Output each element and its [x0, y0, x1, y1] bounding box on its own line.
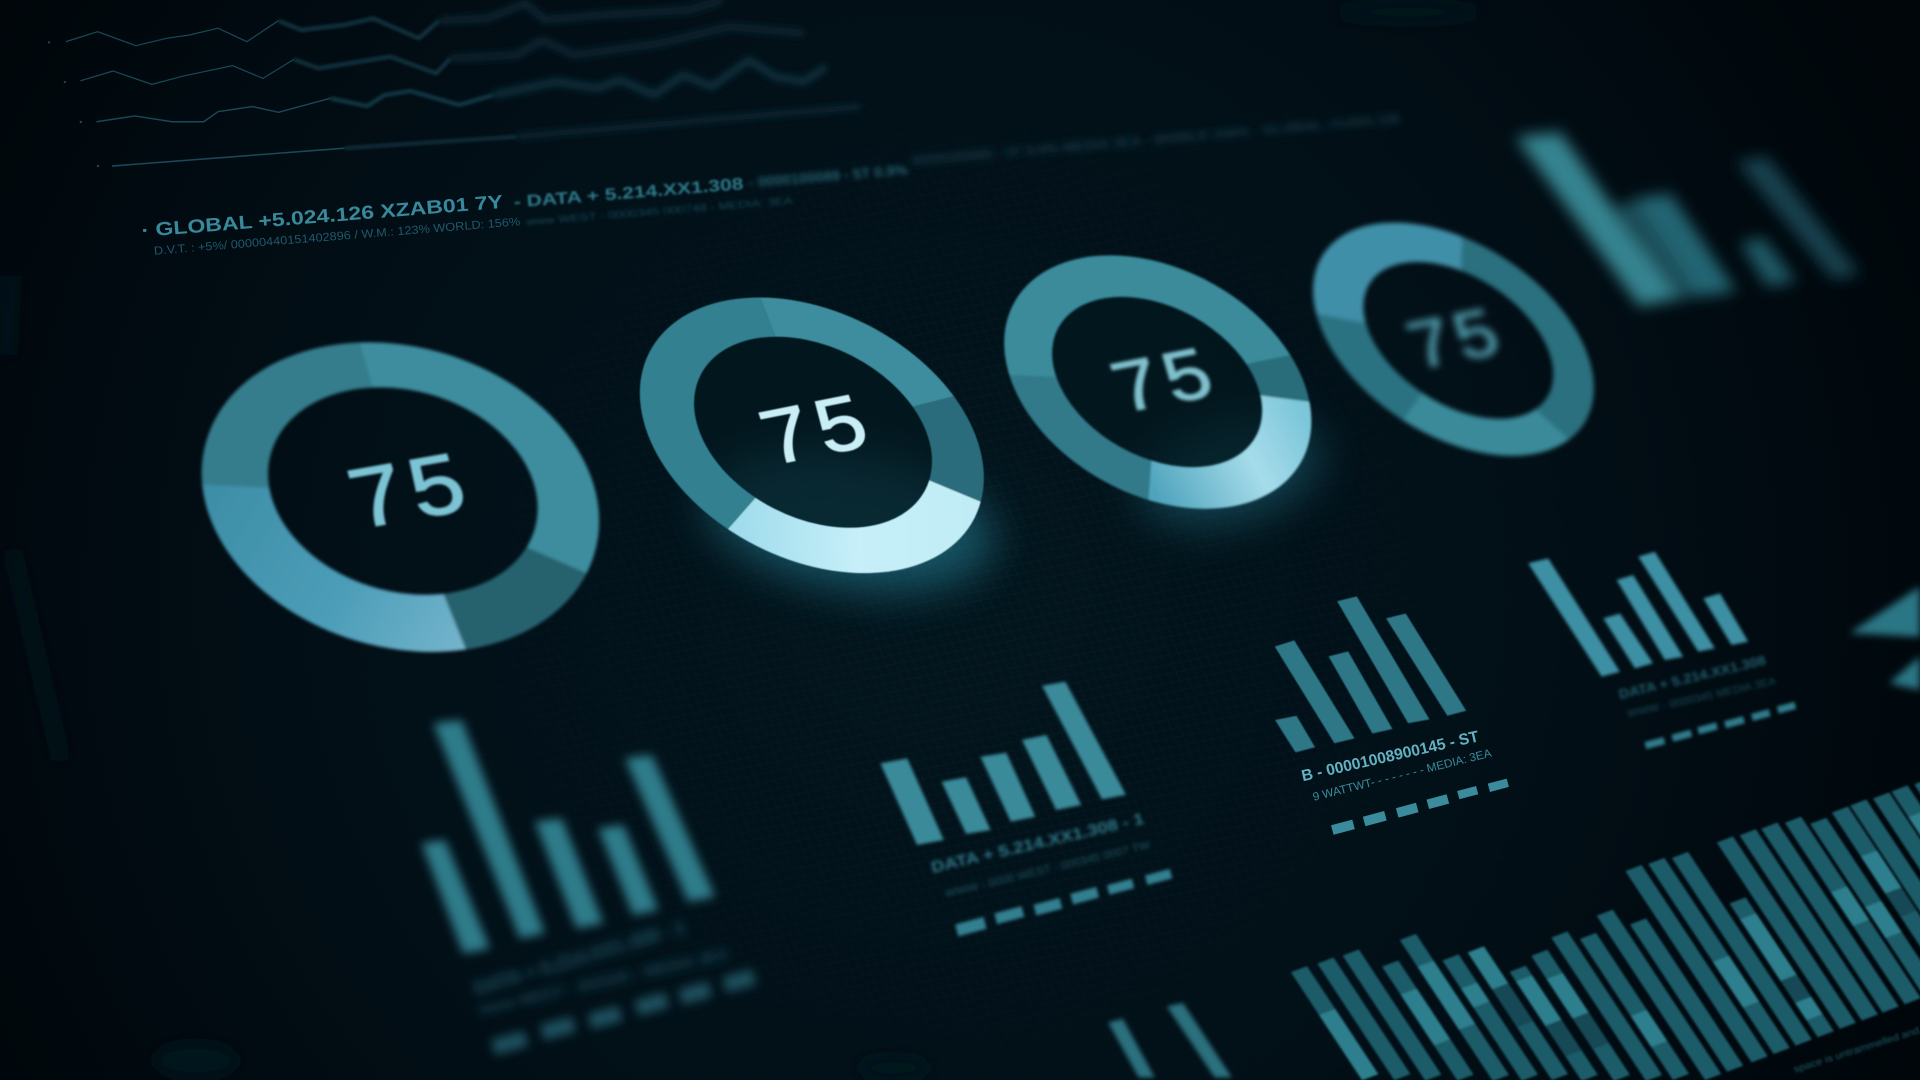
- bars: [880, 682, 1126, 845]
- headline text: continuation: - DATA + 5.214.XX1.308: [513, 174, 744, 212]
- axis dots: [48, 41, 99, 167]
- bar chart 3: [1275, 596, 1509, 835]
- value: 75: [339, 434, 483, 546]
- centre hole shade: [662, 299, 964, 566]
- caption line 2: WWW - 0000345 MEDIA 3EA: [1626, 675, 1778, 720]
- headline text: · GLOBAL +5.024.126 XZAB01 7Y: [141, 192, 504, 242]
- bar chart: top right (blurred): [1516, 132, 1860, 306]
- faint out-of-focus shapes at the edges: [0, 2, 1482, 1079]
- headline text: blurred tail: - 0000100089 - 5T 0.9%: [748, 162, 909, 190]
- glow: [1129, 400, 1332, 543]
- bars: [1275, 596, 1466, 752]
- bar chart: small bottom centre: [1108, 1003, 1232, 1078]
- top band blurred text: 0000100089 - 5T 0.9% MEDIA 3EA - WORLD 156% - GLOBAL +5.024.126: [911, 111, 1400, 168]
- bars, light segments: [1320, 812, 1920, 1079]
- trend line 1: [66, 0, 722, 46]
- donut 1: [200, 340, 602, 654]
- bars: [422, 720, 715, 953]
- value: 75: [750, 377, 885, 481]
- header text: [141, 111, 1400, 258]
- bars, dark base: [1292, 779, 1920, 1080]
- arrow shapes: right edge: [1850, 587, 1920, 690]
- ring segments: [200, 340, 602, 654]
- bars, dark segments: [1493, 888, 1916, 1056]
- dash row: [491, 969, 756, 1055]
- footnote: bottom right: space is untrammelled and: [1793, 1025, 1920, 1076]
- centre hole shade: [1022, 262, 1292, 502]
- dash row: [1644, 702, 1796, 749]
- caption line 2: www WEST - 000345 - MEDIA 3EA: [476, 946, 731, 1019]
- trend line 3: [96, 60, 827, 122]
- trend line 2: [80, 27, 804, 84]
- dash row: [955, 869, 1172, 936]
- caption line 1: DATA + 5.214.XX1.308: [1617, 652, 1768, 702]
- donut 2 with glow: [639, 296, 1013, 615]
- line charts: top left: [48, 0, 861, 167]
- sub text: D.V.T. : +5%/ 00000440151402896 / W.M.: 123% WORLD: 156%: [153, 215, 521, 258]
- ring segments: [639, 296, 984, 574]
- baseline rule: [112, 107, 861, 166]
- bar chart 4: [1528, 552, 1796, 749]
- caption line 2: 9 WATTWT- - - - - - - - MEDIA: 3EA: [1311, 747, 1493, 804]
- bars: [1528, 552, 1748, 677]
- stacked bar chart: bottom right: [1292, 779, 1920, 1080]
- caption line 1: DATA + 5.214.XX1.308 - 1: [471, 916, 688, 1000]
- bar chart 1 (blurred): [422, 720, 756, 1055]
- background grid: [559, 140, 1432, 1029]
- ring segments: [1002, 254, 1313, 510]
- bar chart 2: [880, 682, 1172, 936]
- ring segments: [1310, 219, 1597, 459]
- dash row: [1331, 779, 1509, 835]
- value: 75: [1102, 332, 1229, 428]
- glow: [697, 429, 1005, 612]
- caption line 1: B - 00001008900145 - ST: [1300, 728, 1481, 785]
- donut 3 with glow: [1002, 254, 1336, 544]
- sub text: blurred tail: www WEST - 0000345 000748 - MEDIA: 3EA: [525, 196, 793, 228]
- value: 75: [1398, 293, 1514, 383]
- donut 4: [1310, 219, 1597, 459]
- caption line 1: DATA + 5.214.XX1.308 - 1: [930, 811, 1146, 877]
- caption line 2: WWW - 0000 WEST - 000345 0007 TW: [944, 839, 1152, 900]
